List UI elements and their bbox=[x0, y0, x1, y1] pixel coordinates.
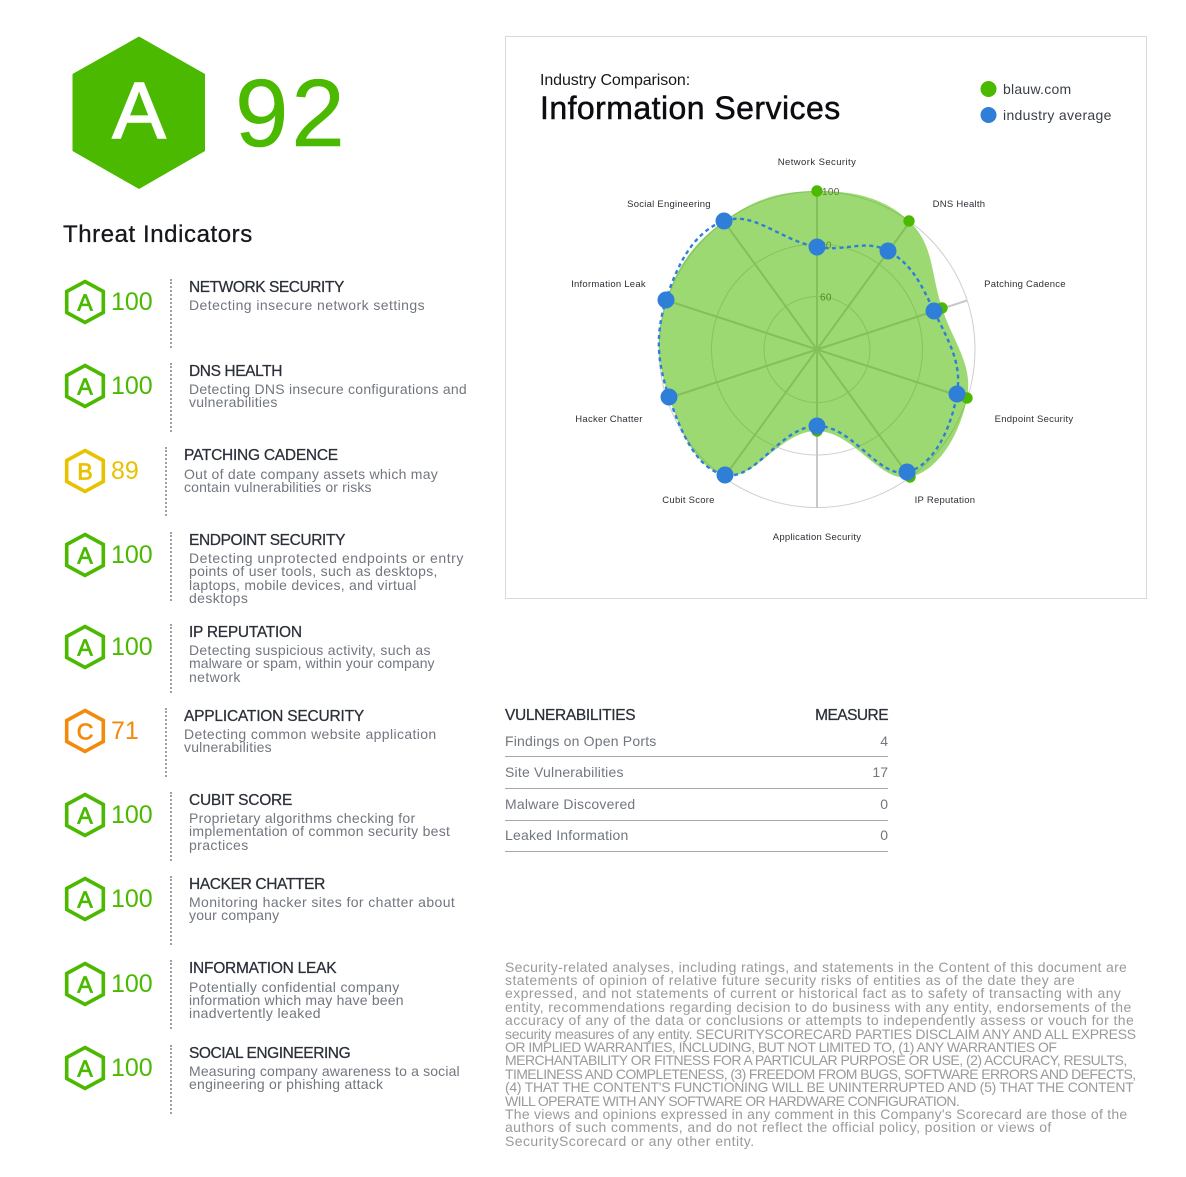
indicator: social engineering: Measuring company awareness to a social bbox=[189, 1063, 460, 1079]
indicator: cubit score: 100 bbox=[111, 801, 153, 829]
indicator: cubit score: A bbox=[77, 802, 93, 828]
legend bbox=[980, 81, 1112, 123]
indicator: dns health: Detecting DNS insecure configurations and bbox=[189, 381, 467, 397]
indicator: cubit score: CUBIT SCORE bbox=[189, 792, 292, 809]
series points: industry average bbox=[658, 212, 966, 484]
indicator: endpoint security bbox=[64, 532, 464, 606]
series points: blauw.com bbox=[660, 185, 973, 483]
scale tick labels: 80 bbox=[820, 240, 832, 252]
indicator: information leak: inadvertently leaked bbox=[189, 1005, 321, 1021]
indicator: ip reputation: IP REPUTATION bbox=[189, 624, 302, 641]
axis labels: Hacker Chatter bbox=[575, 414, 643, 425]
indicator: dns health: DNS HEALTH bbox=[189, 363, 282, 380]
series line: industry average bbox=[659, 219, 958, 475]
indicator: endpoint security: desktops bbox=[189, 590, 248, 606]
table row: site vulnerabilities: Site Vulnerabilities bbox=[505, 764, 624, 780]
axis labels: Application Security bbox=[773, 532, 861, 543]
indicator: application security bbox=[64, 708, 437, 777]
indicator: endpoint security: ENDPOINT SECURITY bbox=[189, 532, 345, 549]
indicator: information leak: INFORMATION LEAK bbox=[189, 960, 336, 977]
axis labels: Network Security bbox=[778, 157, 856, 168]
indicator: network security: 100 bbox=[111, 288, 153, 316]
indicator: network security: Detecting insecure network settings bbox=[189, 297, 425, 313]
radar chart bbox=[571, 157, 1074, 543]
disclaimer text: statements of opinion of relative future security risks of entities as of the date they are bbox=[505, 972, 1075, 988]
disclaimer text: Security-related analyses, including ratings, and statements in the Content of this document are bbox=[505, 958, 1127, 974]
table header: MEASURE bbox=[815, 707, 888, 724]
heading: threat indicators: Threat Indicators bbox=[63, 221, 253, 248]
panel: industry comparison bbox=[505, 36, 1147, 599]
indicator: cubit score: implementation of common security best bbox=[189, 823, 450, 839]
indicator: endpoint security: A bbox=[77, 542, 93, 568]
indicator: patching cadence: B bbox=[77, 458, 93, 484]
indicator: dns health bbox=[64, 363, 467, 432]
panel subtitle: Industry Comparison: bbox=[540, 72, 690, 89]
indicator: hacker chatter bbox=[64, 876, 455, 945]
disclaimer text: (4) THAT THE CONTENT'S FUNCTIONING WILL BE UNINTERRUPTED AND (5) THAT THE CONTENT bbox=[505, 1079, 1133, 1095]
indicator: ip reputation: malware or spam, within your company bbox=[189, 655, 435, 671]
indicator: endpoint security: Detecting unprotected endpoints or entry bbox=[189, 550, 464, 566]
indicator: social engineering: SOCIAL ENGINEERING bbox=[189, 1045, 350, 1062]
indicator: application security: APPLICATION SECURITY bbox=[184, 708, 364, 725]
axis labels: DNS Health bbox=[933, 199, 985, 210]
axis labels: IP Reputation bbox=[915, 495, 975, 506]
indicator: hacker chatter: A bbox=[77, 886, 93, 912]
table row: malware discovered: 0 bbox=[880, 796, 888, 812]
indicator: information leak: Potentially confidential company bbox=[189, 978, 400, 994]
indicator: hacker chatter: Monitoring hacker sites for chatter about bbox=[189, 894, 455, 910]
indicator: social engineering: A bbox=[77, 1056, 93, 1082]
indicator: information leak: information which may have been bbox=[189, 992, 404, 1008]
table header: VULNERABILITIES bbox=[505, 707, 635, 724]
overall score: 92 bbox=[235, 60, 348, 167]
axis labels: Cubit Score bbox=[662, 495, 715, 506]
disclaimer text: entity, recommendations regarding decision to do business with any entity, endorsements of the bbox=[505, 999, 1132, 1015]
indicator: ip reputation: 100 bbox=[111, 633, 153, 661]
disclaimer text: The views and opinions expressed in any comment in this Company's Scorecard are those of the bbox=[505, 1106, 1127, 1122]
indicator: ip reputation: Detecting suspicious activity, such as bbox=[189, 642, 431, 658]
indicator: patching cadence bbox=[64, 447, 438, 516]
disclaimer text: SecurityScorecard or any other entity. bbox=[505, 1133, 755, 1149]
table row: open ports bbox=[505, 726, 888, 757]
axis labels bbox=[571, 157, 1073, 543]
indicator: ip reputation: A bbox=[77, 634, 93, 660]
indicator: cubit score: practices bbox=[189, 837, 249, 853]
indicator: dns health: A bbox=[77, 374, 93, 400]
indicator: information leak: A bbox=[77, 972, 93, 998]
indicator: information leak: 100 bbox=[111, 970, 153, 998]
indicator: hacker chatter: HACKER CHATTER bbox=[189, 876, 325, 893]
overall grade hexagon bbox=[72, 36, 205, 189]
panel title: Information Services bbox=[540, 90, 841, 126]
indicator: information leak bbox=[64, 960, 404, 1029]
axis labels: Patching Cadence bbox=[984, 279, 1066, 290]
table row: open ports: 4 bbox=[880, 733, 888, 749]
indicator: social engineering: engineering or phishing attack bbox=[189, 1076, 383, 1092]
disclaimer text: accuracy of any of the data or conclusions or attempts to independently assess or vouch for the bbox=[505, 1012, 1134, 1028]
indicator: patching cadence: 89 bbox=[111, 457, 139, 485]
indicator: hacker chatter: your company bbox=[189, 907, 279, 923]
disclaimer text: security measures of any entity. SECURITYSCORECARD PARTIES DISCLAIM ANY AND ALL EXPRESS bbox=[505, 1026, 1136, 1042]
indicator: endpoint security: 100 bbox=[111, 541, 153, 569]
indicator: network security: A bbox=[77, 290, 93, 316]
indicator: application security: vulnerabilities bbox=[184, 739, 272, 755]
indicator: patching cadence: contain vulnerabilities or risks bbox=[184, 479, 372, 495]
disclaimer text bbox=[505, 958, 1136, 1149]
scale tick labels bbox=[820, 187, 840, 304]
indicator: network security: NETWORK SECURITY bbox=[189, 279, 344, 296]
table row: site vulnerabilities bbox=[505, 757, 888, 789]
disclaimer text: authors of such comments, and do not reflect the official policy, position or views of bbox=[505, 1119, 1052, 1135]
indicator: cubit score: Proprietary algorithms checking for bbox=[189, 810, 415, 826]
axis labels: Endpoint Security bbox=[995, 414, 1073, 425]
indicator: social engineering: 100 bbox=[111, 1054, 153, 1082]
indicator: application security: 71 bbox=[111, 717, 139, 745]
table row: leaked information: 0 bbox=[880, 827, 888, 843]
indicator: dns health: 100 bbox=[111, 372, 153, 400]
indicator: cubit score bbox=[64, 792, 450, 861]
indicator: application security: Detecting common website application bbox=[184, 726, 437, 742]
indicator: hacker chatter: 100 bbox=[111, 885, 153, 913]
indicator: application security: C bbox=[77, 718, 93, 744]
indicator: endpoint security: points of user tools, such as desktops, bbox=[189, 563, 438, 579]
legend: blauw.com: blauw.com bbox=[1003, 81, 1071, 97]
table header bbox=[504, 707, 888, 724]
disclaimer text: MERCHANTABILITY OR FITNESS FOR A PARTICULAR PURPOSE OR USE, (2) ACCURACY, RESULTS, bbox=[505, 1052, 1127, 1068]
overall grade hexagon: A bbox=[112, 66, 166, 155]
indicator: dns health: vulnerabilities bbox=[189, 394, 278, 410]
indicator: social engineering bbox=[64, 1045, 460, 1114]
disclaimer text: TIMELINESS AND COMPLETENESS, (3) FREEDOM FROM BUGS, SOFTWARE ERRORS AND DEFECTS, bbox=[505, 1066, 1136, 1082]
disclaimer text: OR IMPLIED WARRANTIES, INCLUDING, BUT NOT LIMITED TO, (1) ANY WARRANTIES OF bbox=[505, 1039, 1056, 1055]
disclaimer text: expressed, and not statements of current or historical fact as to safety of transacting with any bbox=[505, 985, 1121, 1001]
indicator: patching cadence: PATCHING CADENCE bbox=[184, 447, 338, 464]
vulnerabilities table bbox=[504, 707, 888, 852]
indicator: ip reputation: network bbox=[189, 669, 241, 685]
indicator: patching cadence: Out of date company assets which may bbox=[184, 466, 438, 482]
axis labels: Social Engineering bbox=[627, 199, 711, 210]
table row: open ports: Findings on Open Ports bbox=[505, 733, 656, 749]
table row: malware discovered bbox=[505, 789, 888, 821]
series area: blauw.com bbox=[659, 191, 968, 478]
scale tick labels: 60 bbox=[820, 292, 832, 304]
indicator: network security bbox=[64, 279, 425, 348]
indicator: endpoint security: laptops, mobile devices, and virtual bbox=[189, 577, 417, 593]
table row: site vulnerabilities: 17 bbox=[872, 764, 888, 780]
scale tick labels: 100 bbox=[822, 187, 840, 198]
table row: leaked information: Leaked Information bbox=[505, 827, 628, 843]
legend: industry average: industry average bbox=[1003, 107, 1112, 123]
table row: malware discovered: Malware Discovered bbox=[505, 796, 635, 812]
indicator: ip reputation bbox=[64, 624, 435, 693]
disclaimer text: WILL OPERATE WITH ANY SOFTWARE OR HARDWARE CONFIGURATION. bbox=[505, 1093, 959, 1109]
axis labels: Information Leak bbox=[571, 279, 646, 290]
table row: leaked information bbox=[505, 820, 888, 852]
